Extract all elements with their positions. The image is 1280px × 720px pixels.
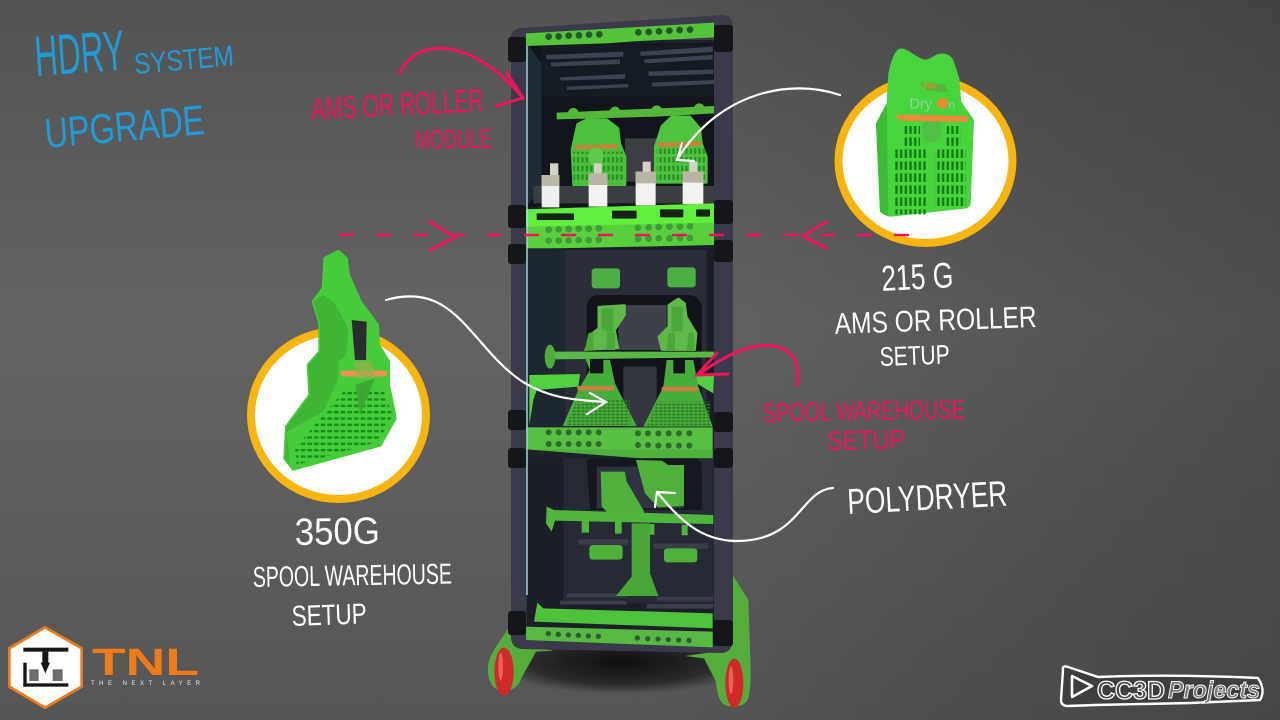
shelf wings	[529, 374, 580, 425]
icon: spool holder	[285, 252, 395, 469]
label: 215 g AMS or roller setup	[834, 254, 1037, 372]
rail mounting nodes	[569, 104, 704, 118]
module rail	[557, 106, 714, 119]
logo word CC3D: CC3D	[1097, 677, 1165, 705]
brand suffix: n	[948, 97, 955, 111]
label line 2: SETUP	[827, 425, 905, 456]
filament bottles	[542, 162, 703, 207]
ceiling slats	[546, 47, 714, 90]
setup line 2: SETUP	[879, 340, 950, 372]
label: AMS or roller module	[310, 82, 492, 155]
label line 1: AMS OR ROLLER	[310, 82, 484, 127]
arrow: spool holder pointer	[386, 296, 606, 414]
logo word Projects: Projects	[1168, 677, 1260, 704]
label: 350 g spool warehouse setup	[253, 511, 452, 633]
arrowhead right	[430, 222, 455, 250]
lower panel strips	[560, 539, 713, 609]
spool holder left	[563, 358, 637, 426]
top bay	[526, 23, 714, 249]
weight: 350G	[294, 511, 380, 554]
comparison dashed line	[340, 222, 910, 250]
logo: TNL	[9, 627, 201, 708]
label line 1: SPOOL WAREHOUSE	[763, 394, 965, 428]
callout: 350g spool warehouse part	[251, 252, 426, 499]
middle shelf	[527, 427, 713, 458]
holder bracket	[533, 186, 714, 203]
bottom bay	[526, 458, 713, 647]
label line 2: MODULE	[415, 124, 492, 155]
logo hexagon	[9, 627, 82, 708]
title word SYSTEM: SYSTEM	[133, 40, 235, 81]
left wheel assembly	[488, 627, 554, 696]
right wheel assembly	[685, 573, 751, 708]
glass edge highlight	[526, 46, 528, 595]
cabinet outer frame	[511, 15, 733, 653]
arrowhead left	[803, 222, 826, 248]
lower tabs	[589, 545, 697, 562]
polydryer lower shape	[601, 472, 645, 515]
logo outline	[1061, 666, 1263, 706]
AMS module left	[572, 119, 625, 185]
bottom bar	[526, 627, 713, 647]
title word UPGRADE: UPGRADE	[43, 96, 206, 157]
window cut-out	[587, 295, 702, 427]
yellow ring	[838, 79, 1012, 243]
callout: 215g AMS or roller part	[838, 49, 1012, 243]
brand on module: Dry	[909, 96, 933, 112]
polydryer rail	[546, 507, 713, 532]
middle bay	[527, 248, 714, 458]
rear holder arms	[585, 298, 697, 350]
label: polydryer: POLYDRYER	[846, 473, 1008, 522]
logo: CC3D Projects	[1061, 666, 1263, 706]
upper shelf	[526, 203, 714, 249]
floor shelf	[534, 603, 713, 628]
arrow: polydryer pointer	[655, 488, 833, 541]
label on module: TNL	[923, 81, 938, 90]
corner brackets	[508, 25, 733, 646]
yellow ring	[251, 331, 426, 499]
spool holder right	[643, 360, 713, 427]
title word HDRY: HDRY	[32, 18, 127, 88]
dark back panel	[625, 138, 657, 182]
title	[32, 18, 235, 157]
setup line 1: SPOOL WAREHOUSE	[253, 559, 452, 594]
polydryer upper shape	[636, 460, 684, 507]
icon: AMS drybox module	[876, 49, 974, 217]
icon: play triangle	[1072, 676, 1092, 697]
polydryer stem	[616, 523, 658, 596]
arrow: spool warehouse pointer	[697, 345, 798, 385]
rack cabinet	[508, 15, 733, 653]
top bar	[526, 23, 714, 46]
AMS module right	[655, 117, 707, 183]
logo tagline: THE NEXT LAYER	[91, 681, 201, 687]
arrow: module weight pointer	[677, 88, 840, 161]
arrow: AMS module pointer	[400, 48, 523, 106]
setup line 1: AMS OR ROLLER	[834, 301, 1037, 341]
weight: 215 G	[880, 254, 954, 299]
cabinet interior	[527, 40, 714, 635]
label: spool warehouse setup	[763, 394, 965, 456]
setup line 2: SETUP	[291, 598, 367, 633]
upper green tabs	[592, 267, 696, 288]
logo wordmark: TNL	[92, 642, 199, 684]
floor shadow under cart	[490, 630, 754, 694]
cross rail	[545, 352, 714, 359]
